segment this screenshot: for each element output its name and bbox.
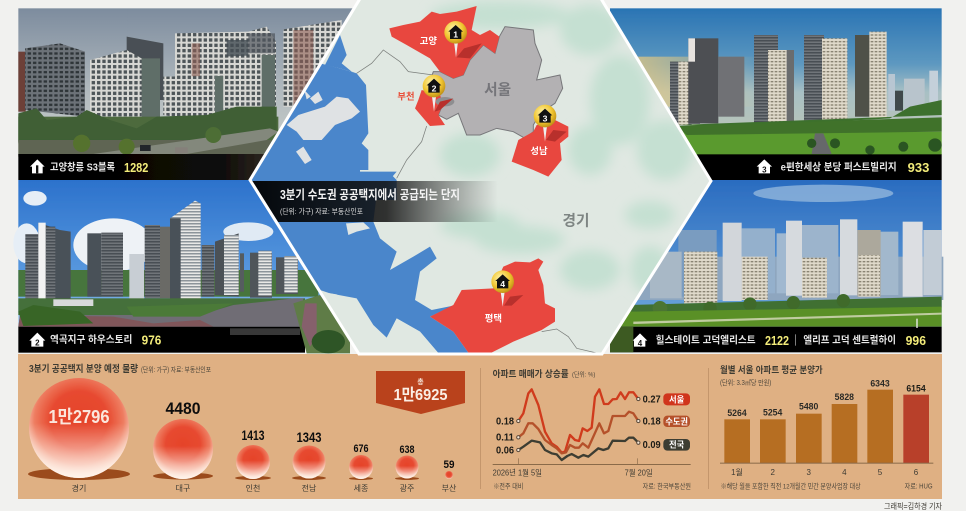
bar: 4월: 5828 <box>835 392 854 402</box>
pin 3: 3 <box>543 113 548 123</box>
region: 서울 <box>427 27 563 138</box>
end values: 0.09 <box>643 440 661 451</box>
label: 힐스테이트 고덕엘리스트 2122, 엘리프 고덕 센트럴하이 996 <box>633 333 926 348</box>
bar: 2월 <box>760 407 786 477</box>
map labels <box>397 35 548 156</box>
region: 성남 <box>512 120 568 177</box>
start values: 0.18 <box>496 417 514 428</box>
bubble: 대구: 대구 <box>176 484 190 493</box>
pins <box>423 21 567 142</box>
label: 고양: 고양 <box>420 35 437 46</box>
bubble: 부산: 부산 <box>442 483 457 493</box>
icon: house 4 <box>633 333 647 348</box>
line: 서울 <box>518 389 638 453</box>
unit and source: (단위: 가구) 자료: 부동산인포 <box>280 206 363 216</box>
icon: house 3: 3 <box>762 166 767 175</box>
bubble: 세종 <box>349 443 373 493</box>
legend: 수도권: 수도권 <box>665 416 688 426</box>
chart heading <box>29 362 211 375</box>
bar: 4월: 4 <box>842 468 847 477</box>
chart heading: (단위: 가구) 자료: 부동산인포 <box>141 365 211 374</box>
unit count 1: 2122 <box>765 333 789 348</box>
bar: 3월 <box>796 402 822 477</box>
complex name: e편한세상 분당 퍼스트빌리지 <box>781 161 897 174</box>
complex name 1: 힐스테이트 고덕엘리스트 <box>656 334 756 347</box>
bubble: 인천: 인천 <box>246 483 260 493</box>
bubble: 경기: 경기 <box>72 483 86 493</box>
footnote and source: ※전주 대비 <box>493 482 523 491</box>
complex name: 역곡지구 하우스토리 <box>50 333 132 346</box>
callout: total: 1만6925 <box>394 386 448 404</box>
label: 역곡지구 하우스토리 976 <box>29 332 161 348</box>
unit count: 933 <box>908 160 929 175</box>
photo panel 1: 고양창릉 S3블록 <box>18 8 355 180</box>
photo panel 3: e편한세상 분당 퍼스트빌리지 <box>610 8 942 180</box>
bubble: 광주: 광주 <box>400 483 414 493</box>
bubble: 대구: 4480 <box>166 399 200 418</box>
source: 자료: HUG <box>905 482 933 491</box>
credit: 그래픽=김하경 기자 <box>884 501 943 511</box>
legend: 서울: 서울 <box>669 394 685 404</box>
bar: 3월: 3 <box>806 468 811 477</box>
complex name 2: 엘리프 고덕 센트럴하이 <box>803 334 896 347</box>
pin 4 <box>491 270 523 307</box>
end values <box>643 395 661 451</box>
pin 4: 4 <box>500 279 505 289</box>
pin 1 <box>444 21 482 58</box>
bubble: 인천: 1413 <box>242 427 265 443</box>
bar: 2월: 5254 <box>763 407 783 417</box>
bar: 5월: 5 <box>878 468 883 477</box>
chart heading: 3분기 공공택지 분양 예정 물량 <box>29 362 138 375</box>
bar: 3월: 5480 <box>799 402 818 412</box>
start values: 0.06 <box>496 446 514 457</box>
line endpoints <box>517 397 640 452</box>
bubble: 경기: 1만2796 <box>48 407 110 427</box>
label: 서울: 서울 <box>484 82 511 99</box>
islands <box>287 90 360 164</box>
unit count 2: 996 <box>906 333 926 348</box>
boundaries <box>357 50 433 178</box>
label: 고양창릉 S3블록 1282 <box>30 159 148 175</box>
photo panel 2: 역곡지구 하우스토리 <box>13 180 352 353</box>
start values: 0.11 <box>496 432 514 443</box>
chart heading: 월별 서울 아파트 평균 분양가 <box>720 364 823 375</box>
bubble: 부산: 59 <box>444 459 454 471</box>
line: 전국 <box>518 438 638 460</box>
bubble: 전남: 1343 <box>296 429 322 445</box>
bubble: 경기 <box>28 378 130 493</box>
pin 2 <box>423 75 454 112</box>
water: Yellow Sea <box>256 35 397 200</box>
bubble: 전남: 전남 <box>302 483 317 493</box>
axis dates <box>493 467 653 477</box>
panel: bar chart of monthly presale prices <box>720 364 933 491</box>
bubble: 세종: 세종 <box>354 484 368 493</box>
label: 평택: 평택 <box>485 313 502 324</box>
start values <box>496 417 514 457</box>
footnote: ※해당 월을 포함한 직전 12개월간 민간 분양사업장 대상 <box>721 482 861 491</box>
heading text: 3분기 수도권 공공택지에서 공급되는 단지 <box>280 187 460 202</box>
bubble: 세종: 676 <box>354 443 368 455</box>
pin 2: 2 <box>432 83 437 93</box>
bubble: 광주 <box>395 444 419 493</box>
legend: 전국 <box>663 439 690 451</box>
legend: 서울 <box>663 393 690 405</box>
chart heading <box>720 364 823 387</box>
icon: house 4: 4 <box>638 339 643 348</box>
bar: 6월: 6154 <box>906 383 926 393</box>
bar: 6월: 6 <box>914 468 919 477</box>
panel: bottom tan background <box>18 354 942 499</box>
callout: total <box>376 371 465 414</box>
unit count: 976 <box>142 332 161 347</box>
pin 1: 1 <box>453 30 458 40</box>
bar: 1월: 1월 <box>731 467 743 477</box>
axis dates: 2026년 1월 5일 <box>493 467 542 477</box>
bar: 6월 <box>903 383 929 477</box>
region: 고양 <box>389 6 499 78</box>
chart heading: (단위: 3.3㎡당 만원) <box>720 378 771 387</box>
footnote and source: 자료: 한국부동산원 <box>643 482 691 491</box>
chart heading: 아파트 매매가 상승률 <box>493 368 569 379</box>
bar: 5월 <box>867 378 893 477</box>
pin 3 <box>534 105 567 142</box>
unit count: 1282 <box>124 160 148 175</box>
photo panel 4: 힐스테이트 고덕엘리스트, 엘리프 고덕 센트럴하이 <box>610 180 943 352</box>
region: 평택 <box>430 258 555 355</box>
chart heading: (단위: %) <box>572 370 595 379</box>
complex name: 고양창릉 S3블록 <box>50 160 115 173</box>
bar: 2월: 2 <box>770 468 775 477</box>
label: e편한세상 분당 퍼스트빌리지 933 <box>757 159 929 175</box>
label: 성남: 성남 <box>530 145 548 156</box>
end values: 0.18 <box>643 417 661 428</box>
line: 수도권 <box>518 412 638 453</box>
land: southwest peninsula <box>329 293 438 352</box>
icon: house 1 <box>30 159 45 173</box>
bubble: 인천 <box>235 427 271 493</box>
bar: 5월: 6343 <box>870 378 890 388</box>
map: hexagon of the capital area <box>240 0 711 355</box>
axis dates: 7월 20일 <box>625 467 653 477</box>
icon: house 2: 2 <box>35 339 40 348</box>
end values: 0.27 <box>643 395 661 406</box>
bar: 4월 <box>832 392 857 477</box>
bubble: 광주: 638 <box>400 444 414 456</box>
bar: 1월 <box>724 408 750 477</box>
green terrain <box>430 1 693 294</box>
label: 부천: 부천 <box>397 90 415 101</box>
callout: total: 총 <box>417 377 424 386</box>
footnote and source <box>493 482 691 491</box>
panel: bubble chart of supply <box>28 362 465 493</box>
bubble: 대구 <box>153 399 213 493</box>
legend: 전국: 전국 <box>669 440 685 450</box>
bubble: 전남 <box>292 429 326 493</box>
label: 경기: 경기 <box>563 213 589 230</box>
icon: house 3 <box>757 159 772 175</box>
region: 부천 <box>415 90 445 126</box>
panel: line chart of apartment price growth <box>493 368 691 491</box>
bar: 1월: 5264 <box>727 408 747 418</box>
map heading <box>250 181 498 222</box>
bubble: 부산 <box>442 459 457 493</box>
